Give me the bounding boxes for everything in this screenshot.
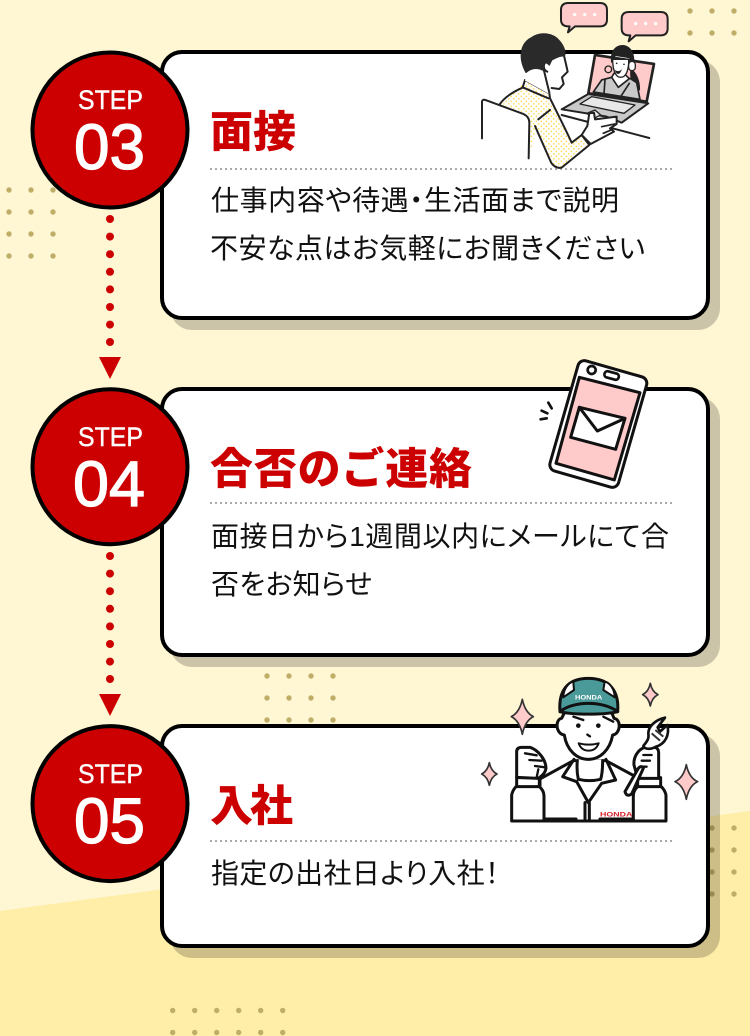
text: result description: 面接日から1週間以内にメールにて合 (211, 521, 669, 552)
chair (482, 100, 529, 158)
laptop base (562, 94, 648, 123)
text: interview description (210, 185, 645, 264)
badge: step 04: 04 (73, 448, 145, 520)
chest logo: HONDA (600, 811, 633, 818)
hand (582, 113, 617, 144)
badge: step 04 (32, 389, 188, 544)
badge: step 05: STEP (78, 759, 143, 789)
heading: joining: 入社 (210, 783, 293, 831)
badge: step 03: 03 (74, 111, 145, 183)
text: result description (211, 521, 669, 600)
badge: step 05: 05 (74, 785, 145, 857)
man (500, 34, 589, 168)
badge: step 03: STEP (78, 85, 143, 115)
heading: interview: 面接 (210, 109, 296, 157)
badge: step 05 (32, 726, 188, 881)
work jacket (512, 759, 666, 821)
text: joining description: 指定の出社日より入社！ (211, 858, 499, 889)
speech bubble left (561, 3, 607, 32)
panel: step 05 joining (162, 726, 720, 958)
badge: step 04: STEP (78, 422, 143, 452)
icon: smartphone with mail (541, 359, 648, 489)
icon: mechanic illustration (482, 678, 698, 821)
laptop screen (588, 55, 654, 102)
cap: HONDA (575, 696, 603, 702)
sparkles (482, 683, 698, 799)
head (557, 708, 619, 759)
connector: step 03 to 04 (99, 215, 121, 379)
text: result description: 否をお知らせ (211, 569, 372, 600)
badge: step 03 (32, 52, 188, 208)
speech bubble right (622, 12, 668, 41)
connector: step 04 to 05 (99, 552, 121, 716)
text: interview description: 仕事内容や待遇・生活面まで説明 (211, 185, 619, 216)
left fist (517, 747, 546, 778)
heading: result notice: 合否のご連絡 (210, 445, 472, 494)
panel: step 04 result notice (162, 389, 720, 667)
icon: online interview illustration (482, 3, 668, 168)
panel: step 03 interview (162, 52, 720, 330)
cap (560, 678, 618, 714)
right fist and wrench (625, 718, 668, 795)
text: interview description: 不安な点はお気軽にお聞きください (210, 233, 645, 264)
woman on screen (593, 45, 640, 99)
